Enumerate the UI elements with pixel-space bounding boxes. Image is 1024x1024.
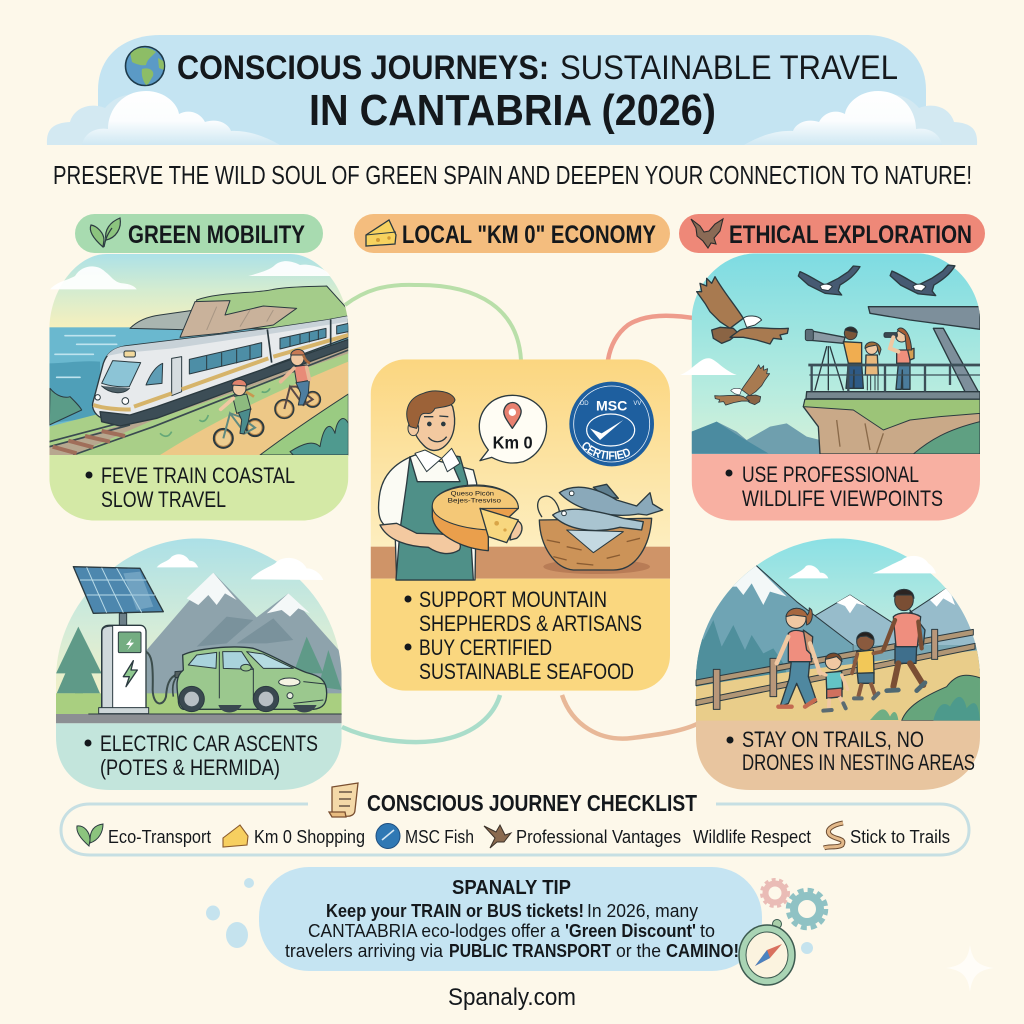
tip text: travelers arriving via — [285, 941, 444, 961]
trail fence — [696, 629, 975, 709]
tip text: 'Green Discount' — [565, 921, 696, 941]
title line 1: CONSCIOUS JOURNEYS: — [177, 49, 549, 87]
decorative bubbles — [206, 878, 813, 954]
item: msc fish: MSC Fish — [405, 827, 474, 847]
clouds: train panel — [50, 261, 330, 289]
bubble: km 0 — [479, 395, 547, 463]
tip text: to — [700, 921, 715, 941]
item: professional vantages — [484, 825, 681, 848]
icon: cheese — [366, 220, 396, 246]
connector: green mobility to local economy — [345, 285, 521, 360]
item: km 0 shopping: Km 0 Shopping — [254, 827, 365, 847]
badge: msc certified: CERTIFIED — [582, 442, 630, 460]
solar panel — [73, 567, 163, 627]
walker: small child — [818, 653, 848, 711]
bullet text: km 0 actions: BUY CERTIFIED — [419, 635, 552, 660]
item: stick to trails: Stick to Trails — [850, 827, 950, 847]
badge: msc certified: MSC — [596, 398, 627, 414]
bullet text: km 0 actions: SHEPHERDS & ARTISANS — [419, 611, 642, 636]
icon: pink gear — [762, 880, 788, 906]
bullet text: electric car: (POTES & HERMIDA) — [100, 755, 280, 780]
item: eco-transport: Eco-Transport — [108, 827, 211, 847]
bullet text: wildlife viewpoints: USE PROFESSIONAL — [742, 462, 919, 487]
item: professional vantages: Professional Vantages — [516, 827, 681, 847]
icon: compass — [739, 920, 795, 985]
illustration: wildlife viewpoint with eagles — [680, 250, 990, 524]
charging station — [99, 625, 187, 714]
tip text: Keep your TRAIN or BUS tickets! — [326, 901, 584, 921]
panel: green mobility train — [49, 254, 348, 520]
cheese wheel: Bejes-Tresviso — [448, 498, 502, 505]
bullet text: wildlife viewpoints — [726, 462, 943, 511]
walker: older child — [852, 632, 882, 698]
badge: msc certified — [569, 382, 654, 466]
panel: ethical exploration viewpoint — [680, 250, 990, 524]
viewpoint platform — [805, 306, 980, 399]
cheese wheel: Queso Picón — [451, 490, 495, 497]
electric car — [88, 647, 342, 714]
item: eco-transport — [77, 824, 211, 847]
cloud: banner left — [47, 91, 280, 145]
bullet text: km 0 actions: SUSTAINABLE SEAFOOD — [419, 659, 634, 684]
bullet text: feve train — [86, 463, 295, 512]
bullet text: feve train: FEVE TRAIN COASTAL — [101, 463, 295, 488]
cyclist: child — [214, 379, 263, 448]
badge: msc certified: VV — [633, 401, 641, 407]
tip text: CANTAABRIA eco-lodges offer a — [308, 921, 561, 941]
bird: small eagle — [715, 365, 770, 405]
seller — [378, 391, 522, 580]
cyclist: adult — [275, 349, 320, 418]
bullet text: electric car — [84, 731, 318, 780]
viewer: child — [865, 342, 881, 390]
checklist heading: CONSCIOUS JOURNEY CHECKLIST — [367, 790, 697, 816]
tip heading: SPANALY TIP — [452, 877, 571, 899]
connector: trails to local economy — [562, 695, 697, 739]
train — [93, 316, 348, 426]
bullet text: km 0 actions: SUPPORT MOUNTAIN — [419, 587, 607, 612]
item: msc fish — [376, 824, 474, 848]
illustration: family walking on a trail — [696, 538, 980, 790]
pill: green mobility: GREEN MOBILITY — [128, 221, 305, 249]
bird: dark eagle centre — [798, 266, 860, 295]
item: km 0 shopping — [223, 825, 365, 847]
bird: large eagle — [697, 277, 788, 344]
basket with fish — [538, 484, 663, 574]
cheese wheel — [432, 485, 518, 551]
panel: local km 0 economy — [370, 359, 670, 691]
bullet text: feve train: SLOW TRAVEL — [101, 487, 226, 512]
icon: globe — [126, 46, 165, 86]
icon: leaf — [90, 218, 120, 247]
bubble: km 0: Km 0 — [493, 433, 533, 453]
bullet text: stay on trails: STAY ON TRAILS, NO — [742, 727, 924, 752]
sparkle — [946, 945, 994, 992]
clouds: trail panel — [788, 556, 936, 578]
title banner — [47, 35, 977, 145]
pill: ethical exploration — [679, 214, 985, 253]
tip text: In 2026, many — [587, 901, 698, 921]
railway track — [49, 350, 348, 455]
tip text: or the — [616, 941, 661, 961]
icon: eagle — [691, 219, 723, 248]
panel: green mobility electric car — [56, 538, 342, 790]
cliff — [803, 399, 980, 454]
bullet text: electric car: ELECTRIC CAR ASCENTS — [100, 731, 318, 756]
title line 2: IN CANTABRIA (2026) — [309, 86, 716, 135]
footer: spanaly.com: Spanaly.com — [448, 984, 576, 1011]
cloud: viewpoint panel — [680, 358, 737, 375]
bullet text: wildlife viewpoints: WILDLIFE VIEWPOINTS — [742, 486, 943, 511]
tip text: CAMINO! — [666, 941, 739, 961]
viewer: adult with binoculars — [884, 328, 914, 389]
checklist — [61, 783, 969, 855]
walker: father — [883, 589, 925, 691]
bird: dark eagle right — [890, 265, 955, 296]
pill: local km 0 economy: LOCAL "KM 0" ECONOMY — [402, 221, 656, 249]
bullet text: stay on trails — [726, 727, 975, 775]
pill: green mobility — [75, 214, 323, 253]
walker: mother — [777, 608, 820, 707]
item: wildlife respect: Wildlife Respect — [693, 827, 811, 847]
checklist box outline — [61, 804, 969, 855]
pill: local km 0 economy — [354, 214, 670, 253]
icon: scroll — [329, 783, 358, 817]
illustration: coastal train and cyclists — [49, 254, 348, 520]
tip panel — [259, 867, 762, 971]
badge: msc certified: DD — [580, 401, 589, 407]
railing — [808, 365, 980, 392]
tip text: PUBLIC TRANSPORT — [449, 941, 611, 961]
icon: teal gear — [788, 890, 826, 928]
text block background — [47, 455, 353, 525]
clouds: car panel — [157, 554, 323, 580]
telescope and tripod — [805, 329, 845, 390]
panel: ethical exploration trail — [696, 538, 980, 790]
tip text — [285, 901, 739, 961]
item: stick to trails — [824, 823, 950, 848]
connector: electric car to local economy — [342, 695, 500, 742]
connector: ethical exploration to local economy — [608, 316, 699, 360]
bullet text: km 0 actions — [404, 587, 642, 684]
title banner: SUSTAINABLE TRAVEL — [560, 49, 898, 87]
cloud: banner right — [744, 91, 977, 145]
illustration: shepherd seller with cheese and fish — [370, 359, 670, 691]
illustration: electric car and solar charger — [56, 538, 342, 790]
pill: ethical exploration: ETHICAL EXPLORATION — [729, 221, 972, 249]
viewer: adult with telescope — [843, 327, 863, 388]
